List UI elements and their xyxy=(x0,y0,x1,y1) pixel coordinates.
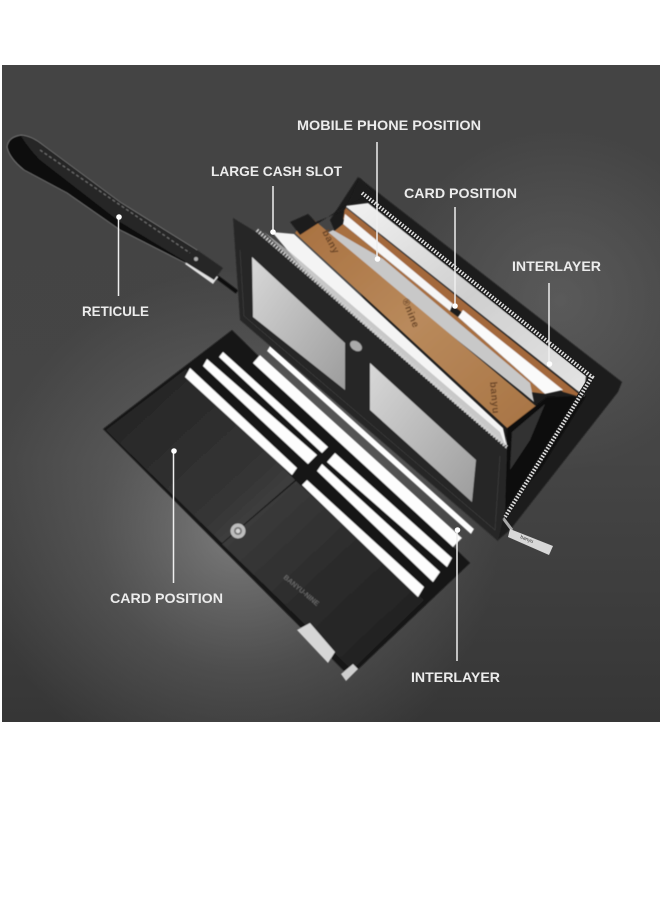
metal corner clip xyxy=(297,623,335,663)
label: interlayer upper xyxy=(512,258,601,367)
right leather flap xyxy=(222,481,424,670)
metal tip clip xyxy=(341,664,358,681)
left leather flap xyxy=(106,369,295,543)
zipper pull xyxy=(503,518,553,555)
top gusset xyxy=(290,178,372,235)
embossed brand: BANYU-NINE xyxy=(282,574,320,608)
label: card position lower xyxy=(110,448,223,606)
lower open panel xyxy=(103,330,474,681)
upper flap with ID windows xyxy=(233,218,507,541)
label: interlayer lower: INTERLAYER xyxy=(411,669,500,685)
brand print mid: ®nine xyxy=(399,297,421,330)
brown main pocket xyxy=(295,215,537,428)
card strip lower xyxy=(458,310,563,394)
cash slot white xyxy=(272,232,507,446)
zipper front xyxy=(257,230,507,447)
background panel xyxy=(2,65,660,722)
gusset highlight xyxy=(510,404,545,470)
label: card position upper xyxy=(404,185,517,309)
label: reticule: RETICULE xyxy=(82,303,149,319)
flap stitching xyxy=(240,250,500,530)
snap button xyxy=(230,524,246,538)
brand print bottom: banyu xyxy=(487,381,501,415)
wallet back body xyxy=(330,177,622,540)
label: card position upper: CARD POSITION xyxy=(404,185,517,201)
brand print top: bany xyxy=(319,228,341,256)
zipper pull: banyu xyxy=(519,534,534,545)
phone slot xyxy=(325,230,534,402)
label: reticule xyxy=(82,214,149,319)
silver band by zipper xyxy=(264,232,507,450)
brown divider xyxy=(333,224,545,394)
silver lining xyxy=(345,203,586,396)
label: mobile phone position xyxy=(297,117,481,262)
label: interlayer upper: INTERLAYER xyxy=(512,258,601,274)
brown strip xyxy=(343,207,584,398)
window rivet xyxy=(347,338,365,354)
ID window right xyxy=(370,363,476,502)
label: large cash slot: LARGE CASH SLOT xyxy=(211,163,342,179)
end gusset xyxy=(505,396,586,510)
wrist strap xyxy=(7,135,237,292)
card strip upper xyxy=(343,214,453,311)
card slots xyxy=(185,346,474,597)
zipper back xyxy=(362,193,592,517)
card slot section xyxy=(186,332,470,610)
label: interlayer lower xyxy=(411,527,500,685)
interior pockets xyxy=(264,178,586,510)
label: card position lower: CARD POSITION xyxy=(110,590,223,606)
label: mobile phone position: MOBILE PHONE POSITION xyxy=(297,117,481,133)
label: large cash slot xyxy=(211,163,342,235)
ID window left xyxy=(252,257,345,390)
